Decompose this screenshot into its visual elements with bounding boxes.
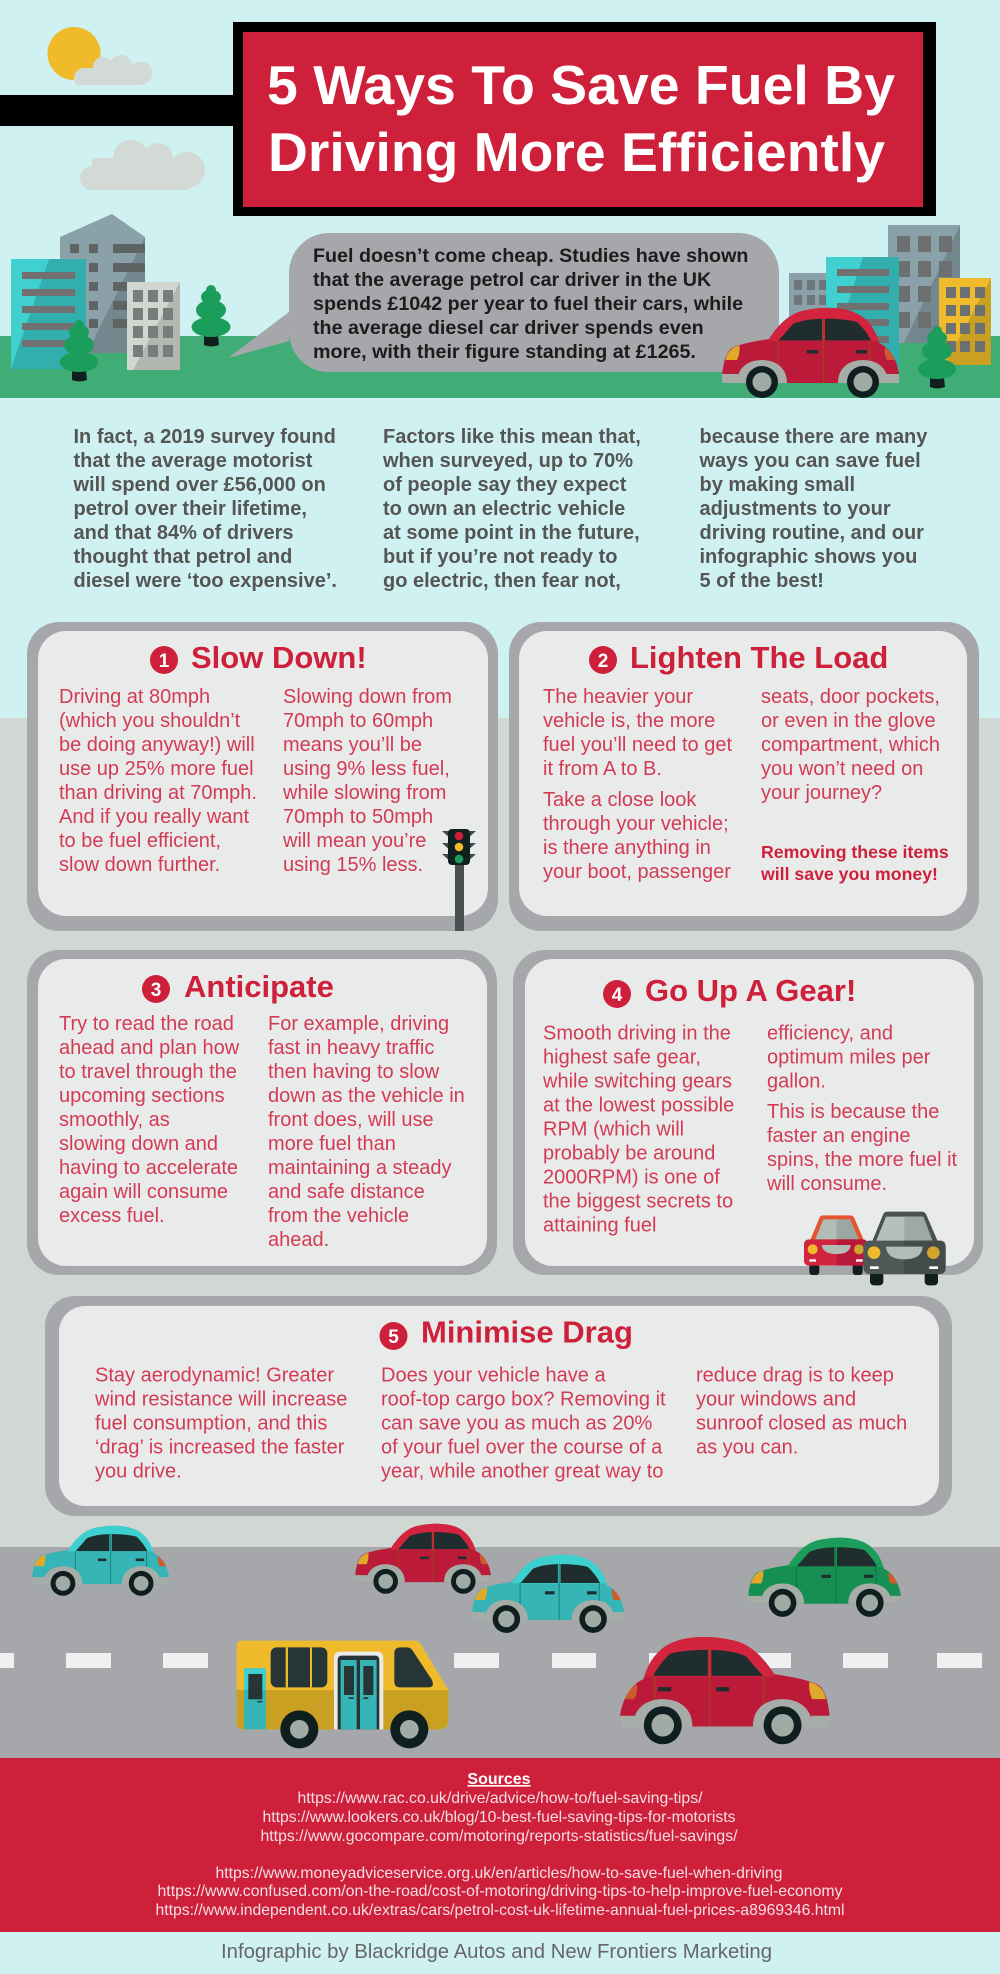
- text: column 2: This is because the: [767, 1101, 939, 1123]
- text: column 1: vehicle is, the more: [543, 710, 715, 732]
- text: column 2: you won’t need on: [761, 758, 923, 780]
- text: column 2: means you’ll be: [283, 734, 422, 756]
- text: column 1: (which you shouldn’t: [59, 710, 241, 732]
- heading: Anticipate: Anticipate: [184, 969, 334, 1004]
- intro text column 3: 5 of the best!: [700, 570, 824, 592]
- panel: 3 Anticipate: [27, 950, 497, 1275]
- text: column 1: again will consume: [59, 1181, 228, 1203]
- heading: Go Up A Gear: 4: [612, 985, 623, 1006]
- icon: red car on hill: [722, 308, 899, 398]
- text: column 2: Does your vehicle have a: [381, 1364, 606, 1386]
- text: column 2: and safe distance: [268, 1181, 425, 1203]
- text: column 2: will mean you’re: [282, 830, 426, 852]
- speech bubble text: the average diesel car driver spends even: [313, 317, 704, 339]
- heading: Go Up A Gear: Go Up A Gear!: [645, 973, 856, 1008]
- text: column 2: year, while another great way to: [381, 1460, 663, 1482]
- footer credit: Infographic by Blackridge Autos and New Frontiers Marketing: [221, 1941, 772, 1963]
- text: column 2: optimum miles per: [767, 1046, 931, 1068]
- text: column 2: maintaining a steady: [268, 1157, 451, 1179]
- text: column 3: reduce drag is to keep: [696, 1364, 894, 1386]
- heading: Anticipate: 3: [151, 980, 161, 1001]
- text: column 1: upcoming sections: [59, 1085, 225, 1107]
- background: sky: [0, 0, 1000, 718]
- callout: removing items: Removing these items: [761, 842, 949, 862]
- intro text column 3: ways you can save fuel: [698, 450, 921, 472]
- text: column 2: For example, driving: [268, 1013, 449, 1035]
- intro text column 2: of people say they expect: [383, 474, 627, 496]
- text: column 1: And if you really want: [59, 806, 250, 828]
- text: column 2: compartment, which: [761, 734, 940, 756]
- heading: Minimise Drag: 5: [388, 1327, 399, 1348]
- icon: teal car front: [472, 1555, 624, 1633]
- right buildings: [789, 225, 991, 370]
- text: column 1: Try to read the road: [59, 1013, 234, 1035]
- text: column 1: to be fuel efficient,: [59, 830, 221, 852]
- text: column 2: using 9% less fuel,: [283, 758, 450, 780]
- text: column 1: to travel through the: [59, 1061, 237, 1083]
- text: column 1: your boot, passenger: [543, 861, 731, 883]
- title text: 5 Ways To Save Fuel By: [267, 54, 895, 116]
- intro text column 2: to own an electric vehicle: [383, 498, 625, 520]
- text: column 1: having to accelerate: [59, 1157, 238, 1179]
- text: column 2: ahead.: [268, 1229, 329, 1251]
- text: column 1: fuel you’ll need to get: [543, 734, 732, 756]
- icon: tree: [192, 285, 230, 346]
- source links: [156, 1790, 844, 1919]
- heading: Minimise Drag: Minimise Drag: [421, 1314, 633, 1350]
- ground: [0, 336, 1000, 398]
- text: column 1: fuel consumption, and this: [95, 1412, 327, 1434]
- text: column 1: Stay aerodynamic! Greater: [95, 1364, 334, 1386]
- source links: https://www.independent.co.uk/extras/cars/petrol-cost-uk-lifetime-annual-fuel-prices-a8969346.html: [156, 1902, 844, 1919]
- text: column 1: The heavier your: [543, 686, 693, 708]
- text: column 2: can save you as much as 20%: [381, 1412, 652, 1434]
- source links: https://www.rac.co.uk/drive/advice/how-to/fuel-saving-tips/: [298, 1790, 703, 1807]
- sources heading: Sources: [467, 1771, 531, 1788]
- icon: bus: [237, 1641, 448, 1748]
- intro text column 3: by making small: [700, 474, 855, 496]
- panel: 1 Slow Down: [27, 622, 498, 931]
- text: column 2: 70mph to 60mph: [283, 710, 433, 732]
- text: column 2: will consume.: [766, 1173, 887, 1195]
- text: column 2: or even in the glove: [761, 710, 936, 732]
- panel: 5 Minimise Drag: [45, 1296, 952, 1516]
- heading: Lighten The Load: Lighten The Load: [630, 640, 888, 675]
- icon: front view cars: [804, 1212, 946, 1285]
- text: column 2: Slowing down from: [283, 686, 452, 708]
- left buildings: [11, 214, 180, 370]
- text: column 2: from the vehicle: [268, 1205, 409, 1227]
- intro text column 2: at some point in the future,: [383, 522, 640, 544]
- text: column 1: is there anything in: [543, 837, 711, 859]
- source links: https://www.moneyadviceservice.org.uk/en/articles/how-to-save-fuel-when-driving: [216, 1865, 782, 1882]
- intro text column 3: adjustments to your: [700, 498, 891, 520]
- intro text column 1: will spend over £56,000 on: [72, 474, 326, 496]
- panel: 2 Lighten The Load: [509, 622, 979, 931]
- text: column 1: excess fuel.: [59, 1205, 165, 1227]
- text: column 2: gallon.: [767, 1070, 826, 1092]
- speech bubble text: more, with their figure standing at £1265.: [313, 341, 696, 363]
- icon: green car: [748, 1538, 901, 1617]
- text: column 1: slow down further.: [59, 854, 220, 876]
- intro text column 3: driving routine, and our: [700, 522, 924, 544]
- callout: removing items: will save you money!: [760, 864, 938, 884]
- text: column 2: efficiency, and: [767, 1022, 893, 1044]
- text: column 1: ahead and plan how: [59, 1037, 240, 1059]
- text: column 1: 2000RPM) is one of: [543, 1166, 720, 1188]
- icon: large red car: [620, 1637, 830, 1744]
- text: column 1: be doing anyway!) will: [59, 734, 255, 756]
- footer band: [0, 1932, 1000, 1974]
- text: column 1: wind resistance will increase: [94, 1388, 347, 1410]
- heading: Slow Down: Slow Down!: [191, 640, 367, 675]
- title text: Driving More Efficiently: [268, 121, 885, 183]
- text: column 2: seats, door pockets,: [761, 686, 940, 708]
- text: column 3: sunroof closed as much: [696, 1412, 907, 1434]
- intro text column 3: because there are many: [700, 426, 928, 448]
- text: column 1: it from A to B.: [543, 758, 662, 780]
- icon: traffic light: [442, 829, 476, 931]
- icon: red car: [355, 1524, 491, 1594]
- text: column 1: than driving at 70mph.: [59, 782, 257, 804]
- text: column 1: Take a close look: [543, 789, 697, 811]
- intro text column 2: when surveyed, up to 70%: [382, 450, 633, 472]
- text: column 3: your windows and: [696, 1388, 856, 1410]
- icon: tree: [918, 326, 956, 388]
- speech bubble text: spends £1042 per year to fuel their cars, while: [313, 293, 743, 315]
- speech bubble: [228, 233, 779, 372]
- text: column 1: Smooth driving in the: [543, 1022, 731, 1044]
- text: column 2: then having to slow: [268, 1061, 440, 1083]
- icon: small cloud: [74, 55, 152, 88]
- text: column 2: down as the vehicle in: [268, 1085, 465, 1107]
- text: column 1: slowing down and: [59, 1133, 218, 1155]
- road: [0, 1547, 1000, 1758]
- text: column 1: through your vehicle;: [543, 813, 729, 835]
- text: column 1: Driving at 80mph: [59, 686, 210, 708]
- intro text column 1: petrol over their lifetime,: [74, 498, 307, 520]
- text: column 1: probably be around: [543, 1142, 715, 1164]
- text: column 2: your journey?: [761, 782, 882, 804]
- intro text column 2: go electric, then fear not,: [383, 570, 621, 592]
- text: column 1: attaining fuel: [543, 1214, 656, 1236]
- text: column 1: smoothly, as: [59, 1109, 170, 1131]
- title box: [233, 22, 936, 216]
- speech bubble text: that the average petrol car driver in the UK: [313, 269, 712, 291]
- intro text column 1: and that 84% of drivers: [74, 522, 294, 544]
- intro text column 1: diesel were ‘too expensive’.: [74, 570, 337, 592]
- intro text column 1: that the average motorist: [74, 450, 313, 472]
- text: column 1: you drive.: [95, 1460, 182, 1482]
- text: column 2: while slowing from: [282, 782, 446, 804]
- text: column 3: as you can.: [696, 1436, 798, 1458]
- intro text column 2: Factors like this mean that,: [383, 426, 641, 448]
- source links: https://www.lookers.co.uk/blog/10-best-fuel-saving-tips-for-motorists: [262, 1809, 736, 1826]
- text: column 1: use up 25% more fuel: [59, 758, 254, 780]
- heading: Slow Down: 1: [159, 651, 170, 672]
- speech bubble text: Fuel doesn’t come cheap. Studies have shown: [313, 245, 748, 267]
- intro text column 3: infographic shows you: [700, 546, 917, 568]
- text: column 2: roof-top cargo box? Removing it: [381, 1388, 666, 1410]
- text: column 1: highest safe gear,: [543, 1046, 701, 1068]
- icon: large cloud: [80, 140, 205, 191]
- text: column 1: at the lowest possible: [543, 1094, 734, 1116]
- icon: teal car: [32, 1526, 169, 1596]
- text: column 2: fast in heavy traffic: [268, 1037, 434, 1059]
- source links: https://www.gocompare.com/motoring/reports-statistics/fuel-savings/: [260, 1828, 738, 1845]
- text: column 1: the biggest secrets to: [543, 1190, 733, 1212]
- icon: tree: [60, 320, 98, 382]
- text: column 1: while switching gears: [542, 1070, 732, 1092]
- intro text column 1: In fact, a 2019 survey found: [74, 426, 336, 448]
- text: column 2: more fuel than: [268, 1133, 396, 1155]
- text: column 2: faster an engine: [767, 1125, 910, 1147]
- text: column 2: front does, will use: [268, 1109, 434, 1131]
- icon: sun: [48, 27, 100, 80]
- road markings: [0, 1653, 982, 1668]
- text: column 2: of your fuel over the course of a: [381, 1436, 663, 1458]
- title bar connector: [0, 95, 233, 126]
- text: column 2: spins, the more fuel it: [767, 1149, 958, 1171]
- intro text column 2: but if you’re not ready to: [383, 546, 617, 568]
- text: column 1: ‘drag’ is increased the faster: [95, 1436, 345, 1458]
- intro text column 1: thought that petrol and: [74, 546, 292, 568]
- sources panel: [0, 1758, 1000, 1932]
- background: grey land: [0, 718, 1000, 1547]
- heading: Lighten The Load: 2: [598, 651, 608, 672]
- text: column 2: 70mph to 50mph: [283, 806, 433, 828]
- source links: https://www.confused.com/on-the-road/cost-of-motoring/driving-tips-to-help-improve-fuel-economy: [158, 1883, 842, 1900]
- text: column 1: RPM (which will: [543, 1118, 684, 1140]
- text: column 2: using 15% less.: [283, 854, 423, 876]
- panel: 4 Go Up A Gear: [513, 950, 983, 1285]
